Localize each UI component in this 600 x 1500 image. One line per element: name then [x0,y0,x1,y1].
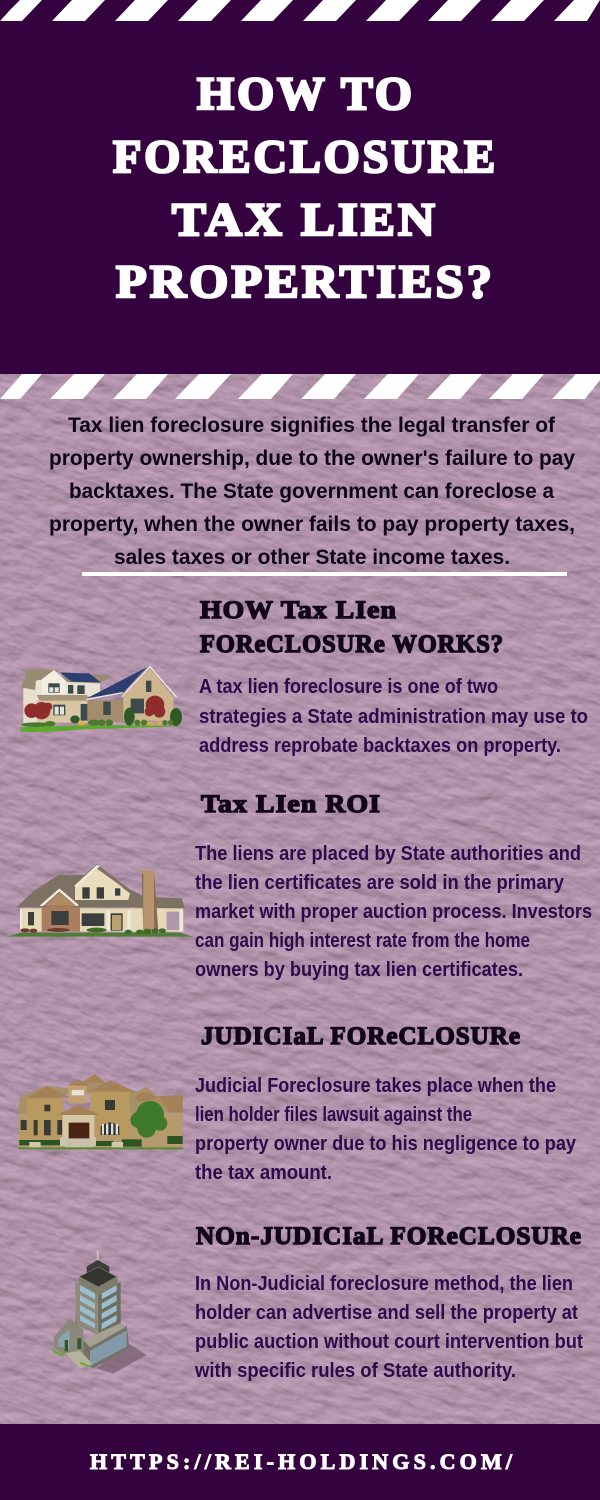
footer url: HTTPS://REI-HOLDINGS.COM/ [90,1449,513,1474]
middle stripes [0,374,600,399]
section: non-judicial foreclosure [53,1223,583,1382]
heading: JUDICIaL FOReCLOSURe [201,1023,521,1050]
title: HOW TO [197,68,415,120]
section: tax lien roi [7,791,592,981]
icon: two-storey house with chimney [7,864,193,937]
heading: NOn-JUDICIaL FOReCLOSURe [196,1223,582,1250]
title: PROPERTIES? [116,256,495,308]
title [113,68,498,308]
body text: A tax lien foreclosure is one of two [199,676,498,698]
intro paragraph [49,414,575,569]
section: how tax lien foreclosure works [20,597,588,757]
body text [195,843,592,981]
icon: suburban house with solar panels [20,667,186,732]
heading [200,597,504,658]
body text: the tax amount. [195,1162,332,1184]
header panel [0,0,600,374]
icon: large brick mansion [18,1074,183,1149]
body text: can gain high interest rate from the home [195,930,530,952]
body text: In Non-Judicial foreclosure method, the lien [195,1273,573,1295]
body text [199,676,588,757]
intro paragraph: Tax lien foreclosure signifies the legal transfer of [68,414,556,437]
body text: owners by buying tax lien certificates. [195,959,523,981]
heading: Tax LIen ROI [201,791,381,818]
intro paragraph: backtaxes. The State government can foreclose a [69,480,554,503]
footer panel [0,1424,600,1500]
body text [195,1075,577,1184]
intro paragraph: property ownership, due to the owner's failure to pay [49,447,575,470]
top stripes [0,0,600,21]
heading: HOW Tax LIen [200,597,397,624]
body text: the lien certificates are sold in the primary [195,872,565,894]
intro paragraph: sales taxes or other State income taxes. [114,546,510,569]
body text: with specific rules of State authority. [194,1360,516,1382]
body text [194,1273,583,1382]
body text: Judicial Foreclosure takes place when the [195,1075,556,1097]
body text: address reprobate backtaxes on property. [199,735,561,757]
intro paragraph: property, when the owner fails to pay property taxes, [49,513,575,536]
icon: office tower [53,1250,147,1373]
title: TAX LIEN [172,194,438,246]
heading: FOReCLOSURe WORKS? [200,631,504,658]
title: FORECLOSURE [113,131,498,183]
body text: lien holder files lawsuit against the [195,1104,472,1126]
section: judicial foreclosure [18,1023,577,1184]
